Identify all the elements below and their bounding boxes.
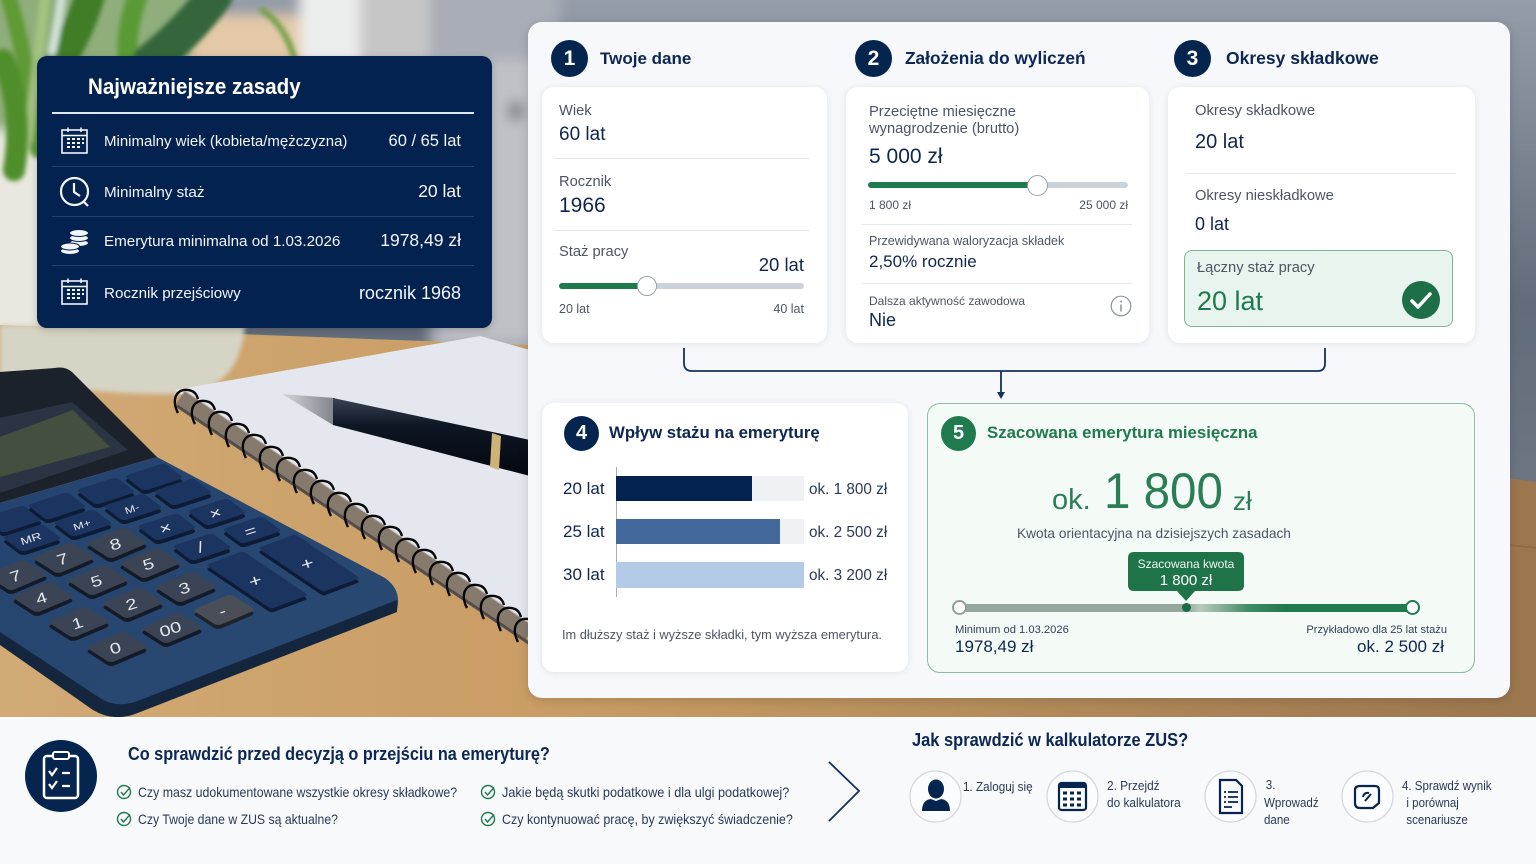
aktywność label: Dalsza aktywność zawodowa	[869, 294, 1025, 308]
slider min: 1 800 zł	[869, 198, 911, 212]
step: wprowadź: 3.	[1266, 777, 1275, 792]
heading: co sprawdzić: Co sprawdzić przed decyzją o przejściu na emeryturę?	[128, 744, 550, 764]
amount: zł	[1233, 486, 1252, 516]
bar: 20 lat	[563, 476, 888, 501]
okresy nieskładkowe value: 0 lat	[1195, 214, 1229, 234]
key labels: 1	[69, 613, 85, 633]
amount	[1052, 463, 1252, 519]
icon: calendar	[61, 278, 88, 305]
plant leaves	[3, 0, 295, 170]
bar: 25 lat: 25 lat	[563, 522, 605, 541]
wynagrodzenie label	[869, 104, 1019, 137]
bar: 30 lat	[563, 562, 888, 588]
slider thumb	[1027, 175, 1048, 196]
step 5 number	[941, 416, 976, 451]
okresy składkowe label: Okresy składkowe	[1195, 103, 1315, 119]
tooltip: szacowana kwota	[1128, 552, 1244, 601]
icon: coins	[61, 230, 88, 254]
step 3 number: 3	[1187, 47, 1198, 70]
key labels: 7	[54, 549, 70, 569]
callout: łączny staż	[1184, 250, 1453, 327]
wiek label: Wiek	[559, 103, 592, 119]
amount: ok.	[1052, 484, 1091, 516]
check item: Czy masz udokumentowane wszystkie okresy składkowe?	[138, 784, 457, 800]
step 3 number	[1174, 40, 1211, 77]
key labels: M-	[124, 502, 141, 517]
slider: wynagrodzenie	[868, 182, 1128, 188]
row: emerytura minimalna: Emerytura minimalna od 1.03.2026	[104, 233, 340, 250]
key labels: 4	[33, 588, 50, 608]
heading: jak sprawdzić: Jak sprawdzić w kalkulatorze ZUS?	[912, 730, 1188, 750]
range marker	[1182, 603, 1191, 612]
value: 60 / 65 lat: 60 / 65 lat	[389, 132, 461, 150]
wiek value: 60 lat	[559, 124, 605, 145]
waloryzacja value: 2,50% rocznie	[869, 252, 977, 271]
check item: Jakie będą skutki podatkowe i dla ulgi podatkowej?	[502, 784, 789, 800]
bar: 25 lat: ok. 2 500 zł	[809, 524, 887, 541]
minimum label: Minimum od 1.03.2026	[955, 624, 1069, 636]
step: sprawdź wynik: scenariusze	[1406, 812, 1468, 827]
slider max: 40 lat	[773, 302, 804, 316]
arrow: chevron	[828, 761, 860, 822]
row: minimalny staż: Minimalny staż	[104, 184, 204, 201]
step: przejdź: do kalkulatora	[1107, 795, 1181, 810]
step: przejdź: 2. Przejdź	[1107, 778, 1160, 793]
value: 1978,49 zł: 1978,49 zł	[380, 230, 461, 250]
step: wprowadź: Wprowadź	[1264, 794, 1319, 810]
panel: założenia	[846, 87, 1149, 343]
key labels: 5	[88, 571, 105, 591]
tooltip: szacowana kwota: 1 800 zł	[1160, 572, 1212, 589]
row: rocznik przejściowy: Rocznik przejściowy	[104, 285, 241, 302]
range start	[952, 600, 967, 615]
step 2 heading: Założenia do wyliczeń	[905, 48, 1086, 68]
icon: clock	[60, 176, 90, 207]
okresy składkowe value: 20 lat	[1195, 131, 1244, 153]
heading: Najważniejsze zasady	[88, 74, 301, 99]
heading: Wpływ stażu na emeryturę	[609, 423, 820, 442]
notebook spiral	[175, 390, 538, 642]
step 4 number	[564, 416, 599, 451]
aktywność value: Nie	[869, 310, 896, 330]
minimum value: 1978,49 zł	[955, 637, 1033, 656]
key labels: /	[195, 538, 206, 556]
range end	[1405, 600, 1420, 615]
key labels: =	[242, 521, 259, 541]
key labels: M+	[72, 518, 92, 533]
icon: check	[1402, 281, 1440, 319]
bottom strip	[0, 717, 1536, 864]
notebook	[175, 336, 538, 644]
step: przejdź	[1046, 770, 1181, 822]
slider: staż	[559, 283, 804, 289]
calculator keys	[0, 463, 360, 667]
panel: twoje dane	[542, 87, 827, 343]
bowl	[0, 325, 245, 394]
bar: 30 lat: ok. 3 200 zł	[809, 567, 887, 584]
key labels: ×	[157, 518, 174, 538]
step 1 number	[551, 40, 588, 77]
staż value: 20 lat	[759, 254, 804, 275]
key labels: 2	[123, 594, 139, 614]
step: zaloguj	[909, 770, 1033, 822]
check item: Czy Twoje dane w ZUS są aktualne?	[138, 811, 338, 827]
icon: calendar	[61, 128, 88, 154]
łączny staż label: Łączny staż pracy	[1197, 260, 1315, 276]
wynagrodzenie value: 5 000 zł	[869, 145, 943, 168]
slider thumb	[637, 276, 657, 296]
step 2 number: 2	[868, 47, 879, 70]
step: sprawdź wynik	[1341, 770, 1492, 827]
step 5 number: 5	[953, 422, 964, 444]
check item: Czy kontynuować pracę, by zwiększyć świadczenie?	[502, 811, 793, 827]
chart note: Im dłuższy staż i wyższe składki, tym wyższa emerytura.	[562, 627, 882, 642]
step 1 number: 1	[564, 47, 575, 70]
key labels: 0	[107, 638, 124, 658]
step: wprowadź	[1204, 770, 1319, 827]
key labels	[7, 502, 316, 658]
step: sprawdź wynik: 4. Sprawdź wynik	[1402, 778, 1492, 793]
tooltip: szacowana kwota: Szacowana kwota	[1138, 557, 1234, 571]
panel: wpływ stażu	[542, 403, 908, 672]
key labels: ×	[207, 503, 224, 523]
icon: clipboard	[25, 740, 97, 812]
rocznik value: 1966	[559, 194, 606, 217]
staż label: Staż pracy	[559, 244, 628, 260]
step 1 heading: Twoje dane	[600, 49, 691, 68]
step: zaloguj: 1. Zaloguj się	[963, 779, 1033, 794]
step 3 heading: Okresy składkowe	[1226, 48, 1379, 68]
rocznik label: Rocznik	[559, 174, 611, 190]
bar chart	[563, 467, 888, 597]
key labels: 8	[107, 534, 124, 554]
waloryzacja label: Przewidywana waloryzacja składek	[869, 234, 1064, 248]
key labels: 00	[157, 618, 184, 641]
bar: 25 lat	[563, 519, 888, 544]
bar: 20 lat: ok. 1 800 zł	[809, 481, 887, 498]
slider max: 25 000 zł	[1079, 198, 1128, 212]
key labels: 7	[7, 566, 23, 586]
wynagrodzenie label: wynagrodzenie (brutto)	[869, 121, 1019, 137]
icon: info	[1110, 296, 1132, 316]
key labels: +	[246, 570, 264, 592]
wooden table	[0, 325, 1536, 720]
step 2 number	[855, 40, 892, 77]
key labels: 5	[140, 554, 157, 574]
wynagrodzenie label: Przeciętne miesięczne	[869, 104, 1016, 120]
bar: 20 lat: 20 lat	[563, 479, 605, 498]
key labels: -	[217, 602, 228, 620]
amount: 1 800	[1104, 463, 1223, 519]
bar: 30 lat: 30 lat	[563, 565, 605, 584]
heading: Szacowana emerytura miesięczna	[987, 423, 1258, 442]
value: rocznik 1968: rocznik 1968	[359, 283, 461, 303]
subtitle: Kwota orientacyjna na dzisiejszych zasadach	[1017, 526, 1291, 541]
value: 20 lat: 20 lat	[418, 181, 461, 201]
key labels: +	[298, 553, 316, 575]
pen	[282, 394, 530, 476]
calculator	[0, 368, 398, 717]
step: sprawdź wynik: i porównaj	[1406, 795, 1459, 810]
panel: najważniejsze zasady	[37, 56, 492, 328]
łączny staż value: 20 lat	[1197, 286, 1263, 316]
slider min: 20 lat	[559, 302, 590, 316]
example value: ok. 2 500 zł	[1357, 637, 1444, 656]
row: minimalny wiek: Minimalny wiek (kobieta/mężczyzna)	[104, 133, 347, 150]
main white panel	[528, 22, 1510, 698]
example label: Przykładowo dla 25 lat stażu	[1306, 624, 1447, 636]
step: wprowadź: dane	[1264, 812, 1290, 827]
connector arrow	[683, 348, 1326, 399]
panel: szacowana emerytura	[927, 403, 1475, 673]
okresy nieskładkowe label: Okresy nieskładkowe	[1195, 188, 1334, 204]
wall	[0, 0, 1536, 520]
key labels: 3	[176, 578, 193, 598]
key labels: MR	[19, 530, 43, 548]
step 4 number: 4	[576, 422, 587, 444]
range track	[960, 604, 1413, 612]
panel: okresy składkowe	[1168, 87, 1475, 343]
